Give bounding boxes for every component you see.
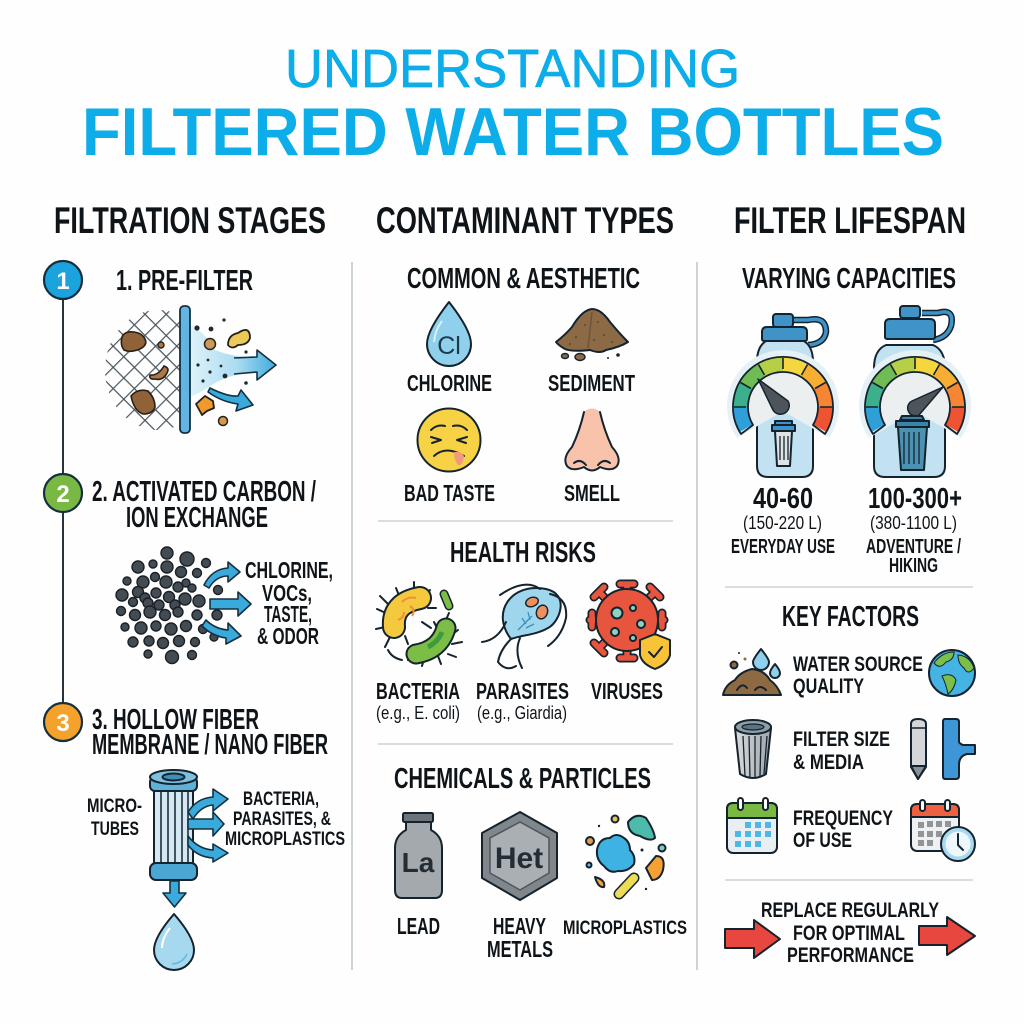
panel: filter lifespan <box>723 200 975 967</box>
filter targets text: BACTERIA, <box>243 789 319 810</box>
capacity: adventure / hiking: ADVENTURE / <box>866 536 961 558</box>
icon: calendar with clock <box>911 800 975 861</box>
stage 3 label: 3. HOLLOW FIBER <box>92 704 259 736</box>
microtubes label: MICRO- <box>87 796 142 817</box>
icon: calendar <box>727 798 777 853</box>
label: frequency of use: FREQUENCY <box>793 806 893 830</box>
stage 3 label: MEMBRANE / NANO FIBER <box>92 729 328 761</box>
icon: small bottle with gauge <box>727 314 839 477</box>
arrows: carbon outputs <box>202 562 251 644</box>
microtubes label <box>87 796 142 840</box>
capacity: adventure / hiking <box>866 483 962 577</box>
icon: bad taste face <box>418 408 480 472</box>
label: smell: SMELL <box>564 480 620 506</box>
label: frequency of use <box>793 806 893 852</box>
icon: hollow fiber filter <box>150 770 197 907</box>
filter targets text: PARASITES, & <box>233 809 331 830</box>
label: water source quality: WATER SOURCE <box>793 652 923 676</box>
label: filter size and media <box>793 727 890 774</box>
icon: filter cartridge <box>735 720 771 778</box>
capacity: everyday use <box>731 483 835 558</box>
microtubes label: TUBES <box>91 819 139 840</box>
title: FILTERED WATER BOTTLES <box>82 94 944 170</box>
label: chlorine: CHLORINE <box>407 370 492 396</box>
label: sediment: SEDIMENT <box>548 370 635 396</box>
filter targets text <box>225 789 345 850</box>
icon: chlorine drop <box>427 302 471 366</box>
label: filter size and media: FILTER SIZE <box>793 727 890 751</box>
label: filter size and media: & MEDIA <box>793 750 864 774</box>
icon: heavy metals hexagon: Het <box>495 842 543 875</box>
label: parasites: PARASITES <box>476 678 569 704</box>
label: bacteria: (e.g., E. coli) <box>376 703 460 723</box>
timeline: 3 <box>56 710 70 737</box>
icon: lead bottle <box>395 813 442 898</box>
callout: replace regularly: PERFORMANCE <box>787 943 914 967</box>
callout: replace regularly: REPLACE REGULARLY <box>761 898 939 922</box>
timeline: 1 <box>56 268 70 295</box>
label: frequency of use: OF USE <box>793 828 852 852</box>
label: bacteria <box>376 678 460 723</box>
icon: sediment pile <box>556 309 628 360</box>
label: water source quality: QUALITY <box>793 674 864 698</box>
label: viruses: VIRUSES <box>591 678 663 704</box>
panel: contaminant types <box>376 200 687 962</box>
arrow: left red <box>725 920 780 958</box>
carbon targets text: & ODOR <box>257 623 319 649</box>
subheading: chemicals and particles: CHEMICALS & PARTICLES <box>394 763 651 795</box>
icon: parasite <box>482 585 566 668</box>
capacity: everyday use: 40-60 <box>753 483 813 515</box>
subheading: key factors: KEY FACTORS <box>782 601 919 633</box>
heading: filtration stages: FILTRATION STAGES <box>54 200 326 241</box>
icon: clean water drop <box>154 914 194 970</box>
capacity: adventure / hiking: (380-1100 L) <box>870 513 957 533</box>
label: water source quality <box>793 652 923 698</box>
label: heavy metals: METALS <box>487 936 553 962</box>
carbon targets text: CHLORINE, <box>245 557 333 583</box>
arrow: right red <box>919 917 975 955</box>
timeline: 2 <box>56 481 70 508</box>
label: bad taste: BAD TASTE <box>404 480 495 506</box>
icon: microplastics <box>586 816 666 894</box>
subheading: health risks: HEALTH RISKS <box>450 537 596 569</box>
icon: virus with shield <box>590 584 670 669</box>
stage 1 label: 1. PRE-FILTER <box>116 265 253 297</box>
callout: replace regularly <box>761 898 939 967</box>
stage 2 label <box>92 476 316 534</box>
capacity: adventure / hiking: 100-300+ <box>868 483 962 515</box>
title <box>82 39 944 170</box>
icon: chlorine drop: Cl <box>437 332 461 360</box>
callout: replace regularly: FOR OPTIMAL <box>793 921 905 945</box>
heading: contaminant types: CONTAMINANT TYPES <box>376 200 674 241</box>
capacity: adventure / hiking: HIKING <box>889 555 938 577</box>
carbon targets text <box>245 557 333 649</box>
stage 3 label <box>92 704 328 761</box>
label: parasites: (e.g., Giardia) <box>477 703 567 723</box>
icon: blue T connector <box>943 719 975 779</box>
label: heavy metals: HEAVY <box>493 913 546 939</box>
subheading: common and aesthetic: COMMON & AESTHETIC <box>407 263 640 295</box>
icon: bacteria <box>376 582 462 666</box>
icon: slim filter <box>911 719 926 779</box>
label: bacteria: BACTERIA <box>376 678 460 704</box>
filter targets text: MICROPLASTICS <box>225 829 345 850</box>
icon: activated carbon granules <box>116 547 222 664</box>
icon: earth <box>929 650 975 696</box>
carbon targets text: TASTE, <box>264 601 312 627</box>
timeline <box>44 261 82 741</box>
stage 2 label: ION EXCHANGE <box>126 502 268 534</box>
icon: nose <box>565 408 619 471</box>
capacity: everyday use: EVERYDAY USE <box>731 536 835 558</box>
carbon targets text: VOCs, <box>262 580 312 606</box>
arrows: filter outputs <box>188 789 228 862</box>
icon: soil and water <box>723 649 781 695</box>
icon: pre-filter mesh <box>100 305 276 433</box>
icon: heavy metals hexagon <box>482 812 557 900</box>
title: UNDERSTANDING <box>285 39 740 99</box>
stage 2 label: 2. ACTIVATED CARBON / <box>92 476 316 508</box>
icon: lead bottle: La <box>402 847 435 878</box>
label: heavy metals <box>487 913 553 962</box>
label: lead: LEAD <box>397 913 440 939</box>
capacity: everyday use: (150-220 L) <box>743 513 822 533</box>
panel: filtration stages <box>44 200 345 970</box>
label: microplastics: MICROPLASTICS <box>563 918 687 939</box>
icon: large bottle with gauge <box>859 306 971 477</box>
label: parasites <box>476 678 569 723</box>
